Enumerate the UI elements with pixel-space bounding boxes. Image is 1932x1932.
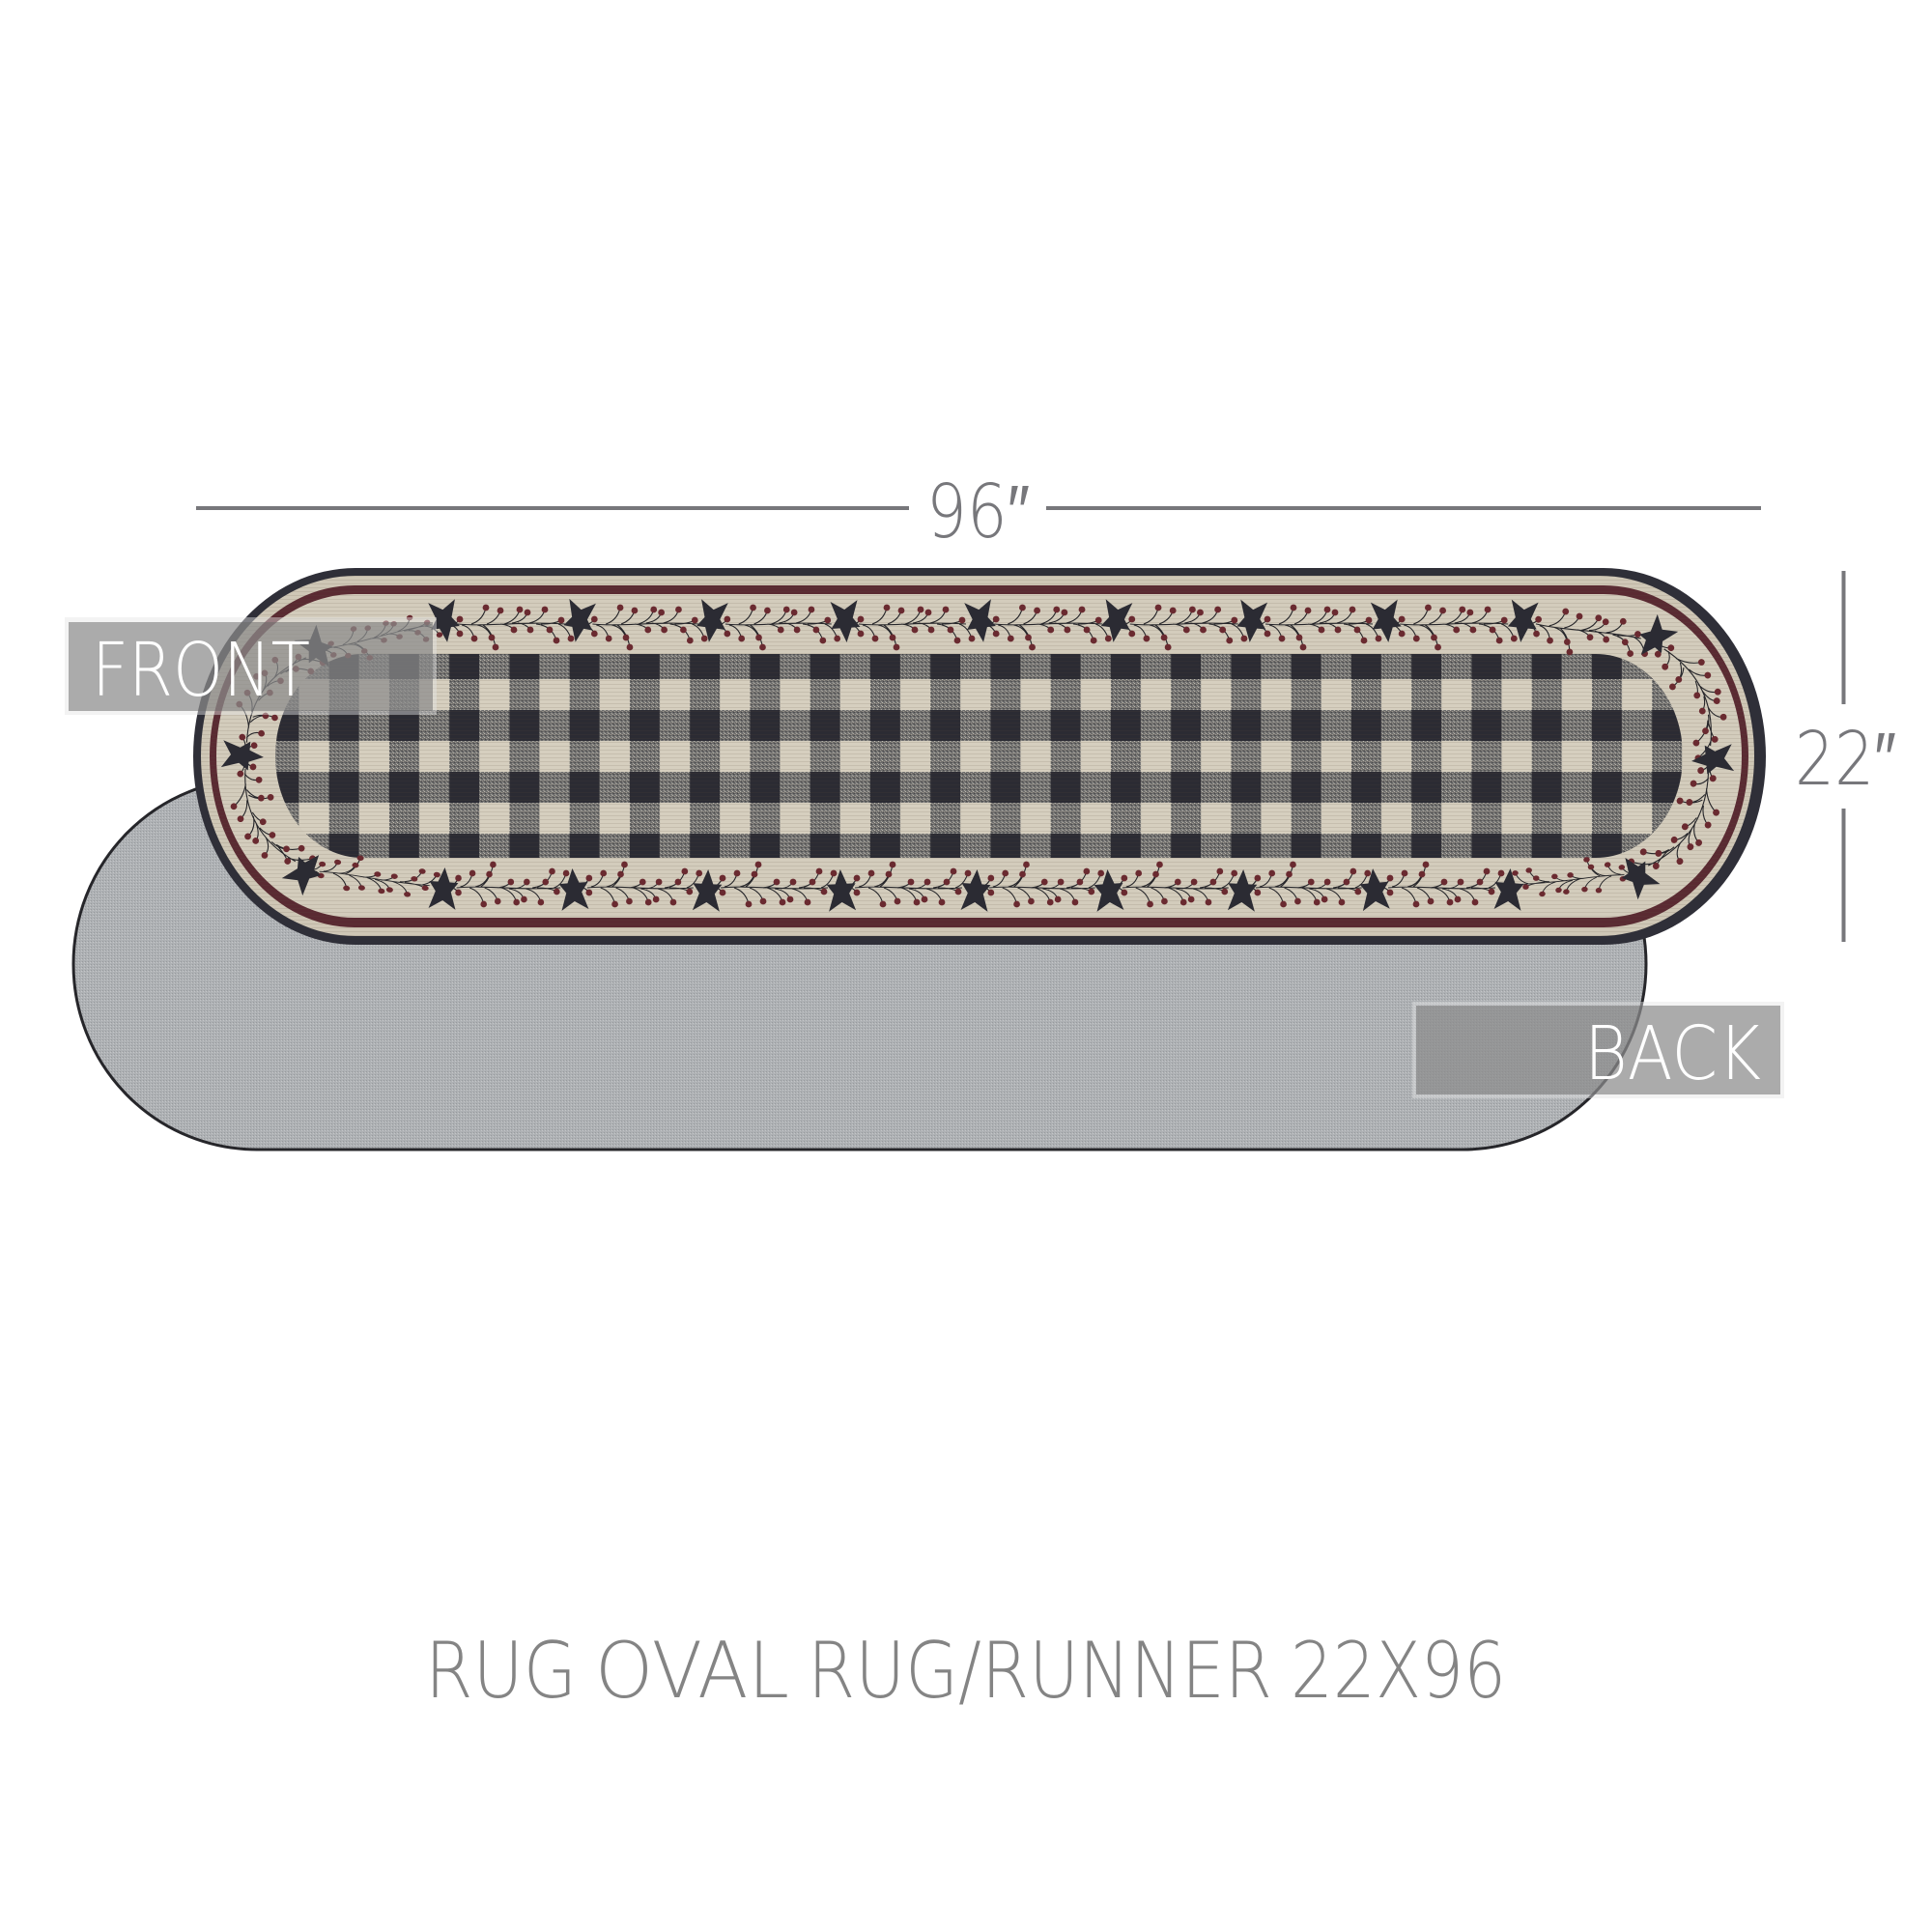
height dimension: 22 inches: 22″ [1795, 717, 1896, 803]
front of rug [193, 568, 1766, 945]
width dimension: 96 inches: 96″ [926, 469, 1030, 555]
outer cream band [201, 576, 1754, 936]
label: FRONT [65, 617, 437, 715]
back of rug [73, 779, 1646, 1150]
product title: OVAL [595, 1626, 789, 1716]
product title: RUG/RUNNER [808, 1626, 1272, 1716]
buffalo check field [275, 654, 1683, 858]
inner cream border [216, 594, 1742, 918]
outer dark braid [193, 568, 1766, 945]
stars [221, 599, 1734, 912]
burgundy band [210, 585, 1748, 927]
product title: RUG [425, 1626, 577, 1716]
braid texture [201, 576, 1754, 936]
label: BACK: BACK [1584, 1011, 1761, 1097]
product title: 22X96 [1291, 1626, 1506, 1716]
label: FRONT: FRONT [92, 628, 310, 714]
infographic canvas [65, 482, 1895, 1704]
label: BACK [1412, 1002, 1784, 1098]
berry vines [213, 604, 1745, 907]
